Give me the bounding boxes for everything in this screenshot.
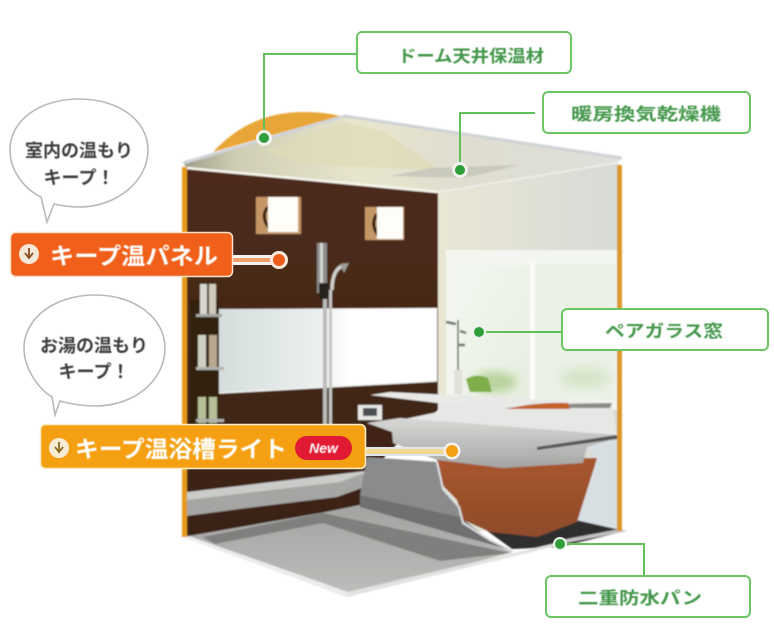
callout: heating ventilation dryer xyxy=(452,92,750,178)
callout: double glazed window: ペアガラス窓 xyxy=(605,322,723,341)
callout: dome ceiling insulation xyxy=(256,32,571,146)
callout: double glazed window xyxy=(472,309,768,350)
counter shelf xyxy=(370,392,617,436)
bathroom cutaway illustration xyxy=(182,112,627,597)
leader: keep warm tub light xyxy=(365,442,460,460)
right orange strip xyxy=(617,165,622,531)
tag: keep warm tub light: キープ温浴槽ライト xyxy=(75,436,287,462)
tub rim xyxy=(367,418,617,468)
bubble text: キープ！ xyxy=(59,362,129,382)
callout: double waterproof pan xyxy=(546,537,750,617)
callout: double waterproof pan: 二重防水パン xyxy=(578,589,702,608)
dark brown wall panel xyxy=(187,168,438,537)
window xyxy=(446,250,618,410)
shelf with bottles xyxy=(190,284,224,425)
bubble text xyxy=(40,336,148,382)
white cut line xyxy=(437,462,513,551)
orange lid on counter xyxy=(507,403,570,409)
apron panel xyxy=(360,457,513,551)
floor xyxy=(183,505,627,597)
wall light right xyxy=(365,207,404,240)
bubble text: お湯の温もり xyxy=(40,336,148,356)
new badge: New xyxy=(309,440,339,456)
ceiling frame xyxy=(183,116,622,163)
speech bubble: room warmth xyxy=(10,99,148,222)
ceiling xyxy=(183,116,622,192)
bathtub body xyxy=(437,458,597,537)
tag: keep warm tub light xyxy=(40,424,366,468)
new badge xyxy=(295,436,352,460)
icon: orange dome arc behind ceiling xyxy=(213,112,340,152)
leader: keep warm panel xyxy=(232,251,288,269)
tag: keep warm panel: キープ温パネル xyxy=(50,243,218,269)
left orange strip xyxy=(182,167,187,537)
bubble text xyxy=(25,141,133,188)
tag: keep warm panel xyxy=(10,232,232,276)
control panel xyxy=(358,405,382,420)
icon: down arrow circle xyxy=(19,244,39,264)
bench xyxy=(187,470,373,516)
bubble text: キープ！ xyxy=(44,168,114,188)
bubble text: 室内の温もり xyxy=(25,141,133,161)
right wall below tub xyxy=(572,438,617,531)
right wall xyxy=(438,163,618,531)
tub base xyxy=(486,520,625,549)
wall light left xyxy=(256,197,301,234)
icon: down arrow circle xyxy=(49,438,69,458)
shower rail and head xyxy=(317,243,349,430)
mirror xyxy=(219,308,437,393)
callout: dome ceiling insulation: ドーム天井保温材 xyxy=(398,47,544,66)
plant on windowsill xyxy=(412,320,492,394)
speech bubble: bath warmth xyxy=(24,295,165,415)
callout: heating ventilation dryer: 暖房換気乾燥機 xyxy=(571,105,721,124)
